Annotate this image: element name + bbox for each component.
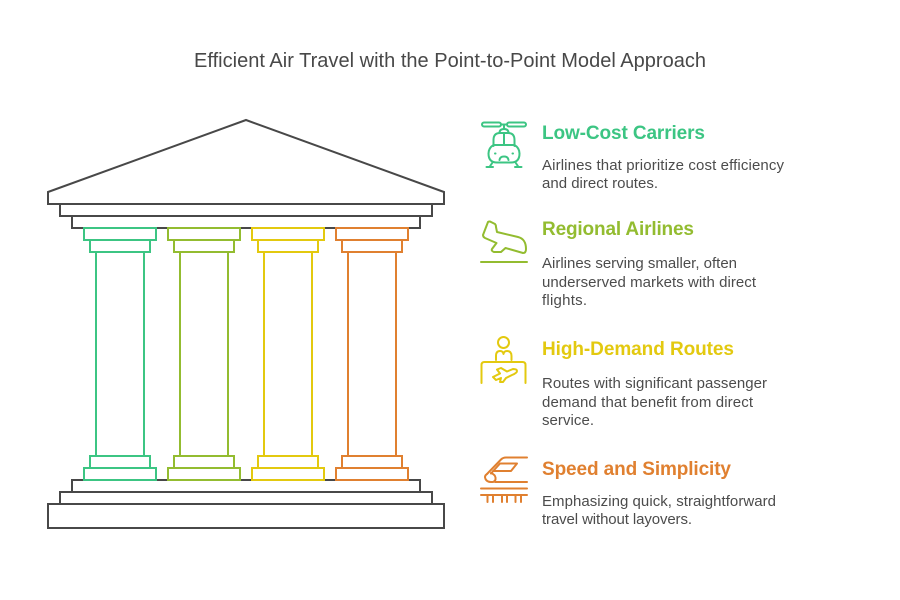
pillar: high-demand routes xyxy=(252,228,324,480)
description: low-cost carriers: and direct routes. xyxy=(542,175,658,192)
heading: speed and simplicity: Speed and Simplicity xyxy=(542,459,731,480)
heading: regional airlines: Regional Airlines xyxy=(542,219,694,240)
heading: low-cost carriers: Low-Cost Carriers xyxy=(542,123,705,144)
description: speed and simplicity xyxy=(542,493,776,528)
icon: airline service desk xyxy=(482,337,526,383)
heading: high-demand routes: High-Demand Routes xyxy=(542,339,734,360)
description: low-cost carriers xyxy=(542,157,784,192)
icon: helicopter xyxy=(482,122,526,167)
temple base steps xyxy=(48,480,444,528)
pillar: regional airlines xyxy=(168,228,240,480)
description: high-demand routes xyxy=(542,375,767,429)
icon: plane landing xyxy=(481,222,527,262)
description: regional airlines: flights. xyxy=(542,292,587,309)
description: regional airlines: Airlines serving smaller, often xyxy=(542,255,737,272)
description: high-demand routes: service. xyxy=(542,412,594,429)
description: high-demand routes: demand that benefit from direct xyxy=(542,394,754,411)
icon: high-speed train xyxy=(481,458,527,502)
pillar: speed and simplicity xyxy=(336,228,408,480)
description: speed and simplicity: Emphasizing quick, straightforward xyxy=(542,493,776,510)
description: low-cost carriers: Airlines that prioritize cost efficiency xyxy=(542,157,784,174)
temple roof and entablature xyxy=(48,120,444,228)
description: high-demand routes: Routes with significant passenger xyxy=(542,375,767,392)
description: regional airlines xyxy=(542,255,757,309)
description: speed and simplicity: travel without layovers. xyxy=(542,511,692,528)
pillar: low-cost carriers xyxy=(84,228,156,480)
title: Efficient Air Travel with the Point-to-Point Model Approach xyxy=(194,50,706,72)
description: regional airlines: underserved markets with direct xyxy=(542,274,757,291)
